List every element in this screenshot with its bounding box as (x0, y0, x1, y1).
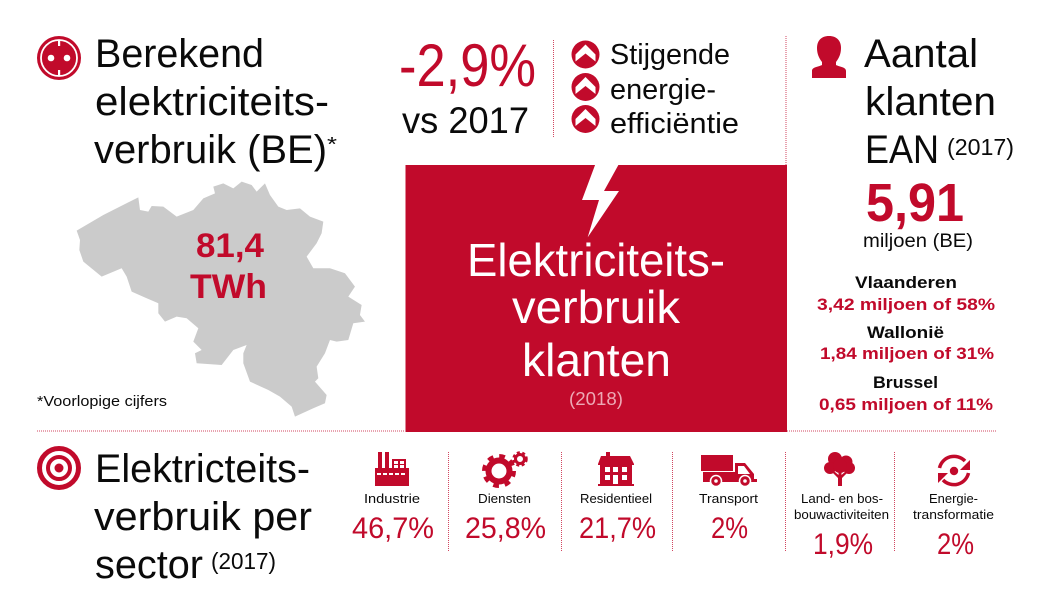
icon: gears (484, 452, 526, 486)
icon: house (598, 452, 634, 486)
sector: Energietransformatie (913, 456, 994, 561)
text: Stijgende energie-efficiëntie: Stijgende (610, 39, 730, 71)
sector: Land- en bosbouwactiviteiten: Land- en bos- (801, 491, 883, 506)
sector: Diensten: 25,8% (465, 512, 546, 545)
sector: Diensten: Diensten (478, 491, 531, 506)
sector: Land- en bosbouwactiviteiten: 1,9% (813, 528, 873, 561)
title: Elektriciteitsverbruik klanten: verbruik (512, 281, 681, 333)
sector: Energietransformatie: Energie- (929, 491, 978, 506)
region: Wallonië: Wallonië (867, 324, 944, 342)
heading: Berekend elektriciteitsverbruik (BE): elektriciteits- (95, 80, 329, 124)
icon: power socket (37, 36, 81, 80)
map of Belgium (77, 182, 365, 417)
heading: Aantal klanten EAN (2017): Aantal (864, 32, 978, 76)
heading: Elektricteitsverbruik per sector (2017): sector (95, 543, 203, 587)
region: Vlaanderen (817, 274, 995, 314)
panel: central red title block (406, 159, 787, 432)
region: Brussel: Brussel (873, 374, 938, 392)
icon: lightning bolt (582, 159, 622, 237)
footnote: *Voorlopige cijfers (37, 393, 167, 410)
sector: Transport: Transport (699, 491, 758, 506)
label: vs 2017: vs 2017 (402, 100, 529, 141)
value: 81,4 TWh (190, 227, 267, 306)
heading: Berekend elektriciteitsverbruik (BE): Berekend (95, 32, 264, 76)
icon: cycle arrows (938, 456, 970, 485)
heading: Elektricteitsverbruik per sector (2017) (94, 447, 312, 587)
icon: truck (701, 455, 757, 486)
value: 81,4 TWh: TWh (190, 268, 267, 306)
heading: Aantal klanten EAN (2017) (864, 32, 1014, 172)
panel: calculated electricity consumption (37, 32, 365, 417)
sector: Land- en bosbouwactiviteiten (794, 452, 889, 561)
year: 2018: (2018) (569, 389, 623, 409)
sector: Energietransformatie: transformatie (913, 507, 994, 522)
sector: Industrie (352, 452, 434, 545)
value: 5,91 miljoen: miljoen (BE) (863, 231, 973, 252)
heading: Elektricteitsverbruik per sector (2017): verbruik per (94, 495, 312, 539)
heading: Elektricteitsverbruik per sector (2017): Elektricteits- (95, 447, 310, 491)
icons: up chevrons (572, 40, 600, 133)
sector: Transport: 2% (711, 512, 748, 545)
region: Wallonië (820, 324, 994, 363)
sector: Diensten (465, 452, 546, 545)
icon: factory (375, 452, 409, 486)
heading: Berekend elektriciteitsverbruik (BE): verbruik (BE) (94, 128, 327, 172)
region: Vlaanderen: 3,42 miljoen of 58% (817, 296, 995, 314)
value: 5,91 miljoen: 5,91 (866, 173, 964, 233)
heading: Aantal klanten EAN (2017): EAN (865, 128, 939, 172)
sector: Residentieel (579, 452, 656, 545)
region: Brussel (819, 374, 993, 414)
region: Brussel: 0,65 miljoen of 11% (819, 396, 993, 414)
sector: Industrie: Industrie (364, 491, 420, 506)
region: Vlaanderen: Vlaanderen (855, 274, 957, 292)
sector: Transport (699, 455, 758, 545)
title: Elektriciteitsverbruik klanten: Elektriciteits- (467, 234, 725, 286)
value: -2,9%: -2,9% (399, 32, 536, 99)
panel: number of customers (812, 32, 1014, 414)
value: 81,4 TWh: 81,4 (196, 227, 264, 265)
heading: Aantal klanten EAN (2017): (2017) (947, 134, 1014, 160)
heading: Elektricteitsverbruik per sector (2017): (2017) (211, 548, 276, 574)
text: Stijgende energie-efficiëntie: energie- (610, 74, 716, 106)
sector: Land- en bosbouwactiviteiten: bouwactiviteiten (794, 507, 889, 522)
title: Elektriciteitsverbruik klanten (467, 234, 725, 386)
heading: Berekend elektriciteitsverbruik (BE): * (327, 134, 337, 156)
sector: Residentieel: 21,7% (579, 512, 656, 545)
panel: rising energy efficiency (572, 39, 739, 140)
sector: Industrie: 46,7% (352, 512, 434, 545)
icon: target (40, 448, 78, 488)
icon: tree (824, 452, 855, 486)
panel: change versus 2017 (399, 32, 536, 141)
heading: Berekend elektriciteitsverbruik (BE) (94, 32, 337, 172)
text: Stijgende energie-efficiëntie (610, 39, 739, 140)
sector: Residentieel: Residentieel (580, 491, 652, 506)
title: Elektriciteitsverbruik klanten: klanten (522, 334, 671, 386)
icon: person (812, 36, 846, 78)
sector: Energietransformatie: 2% (937, 528, 974, 561)
region: Wallonië: 1,84 miljoen of 31% (820, 345, 994, 363)
text: Stijgende energie-efficiëntie: efficiëntie (610, 108, 739, 140)
heading: Aantal klanten EAN (2017): klanten (865, 80, 996, 124)
panel: consumption per sector heading (40, 447, 312, 587)
